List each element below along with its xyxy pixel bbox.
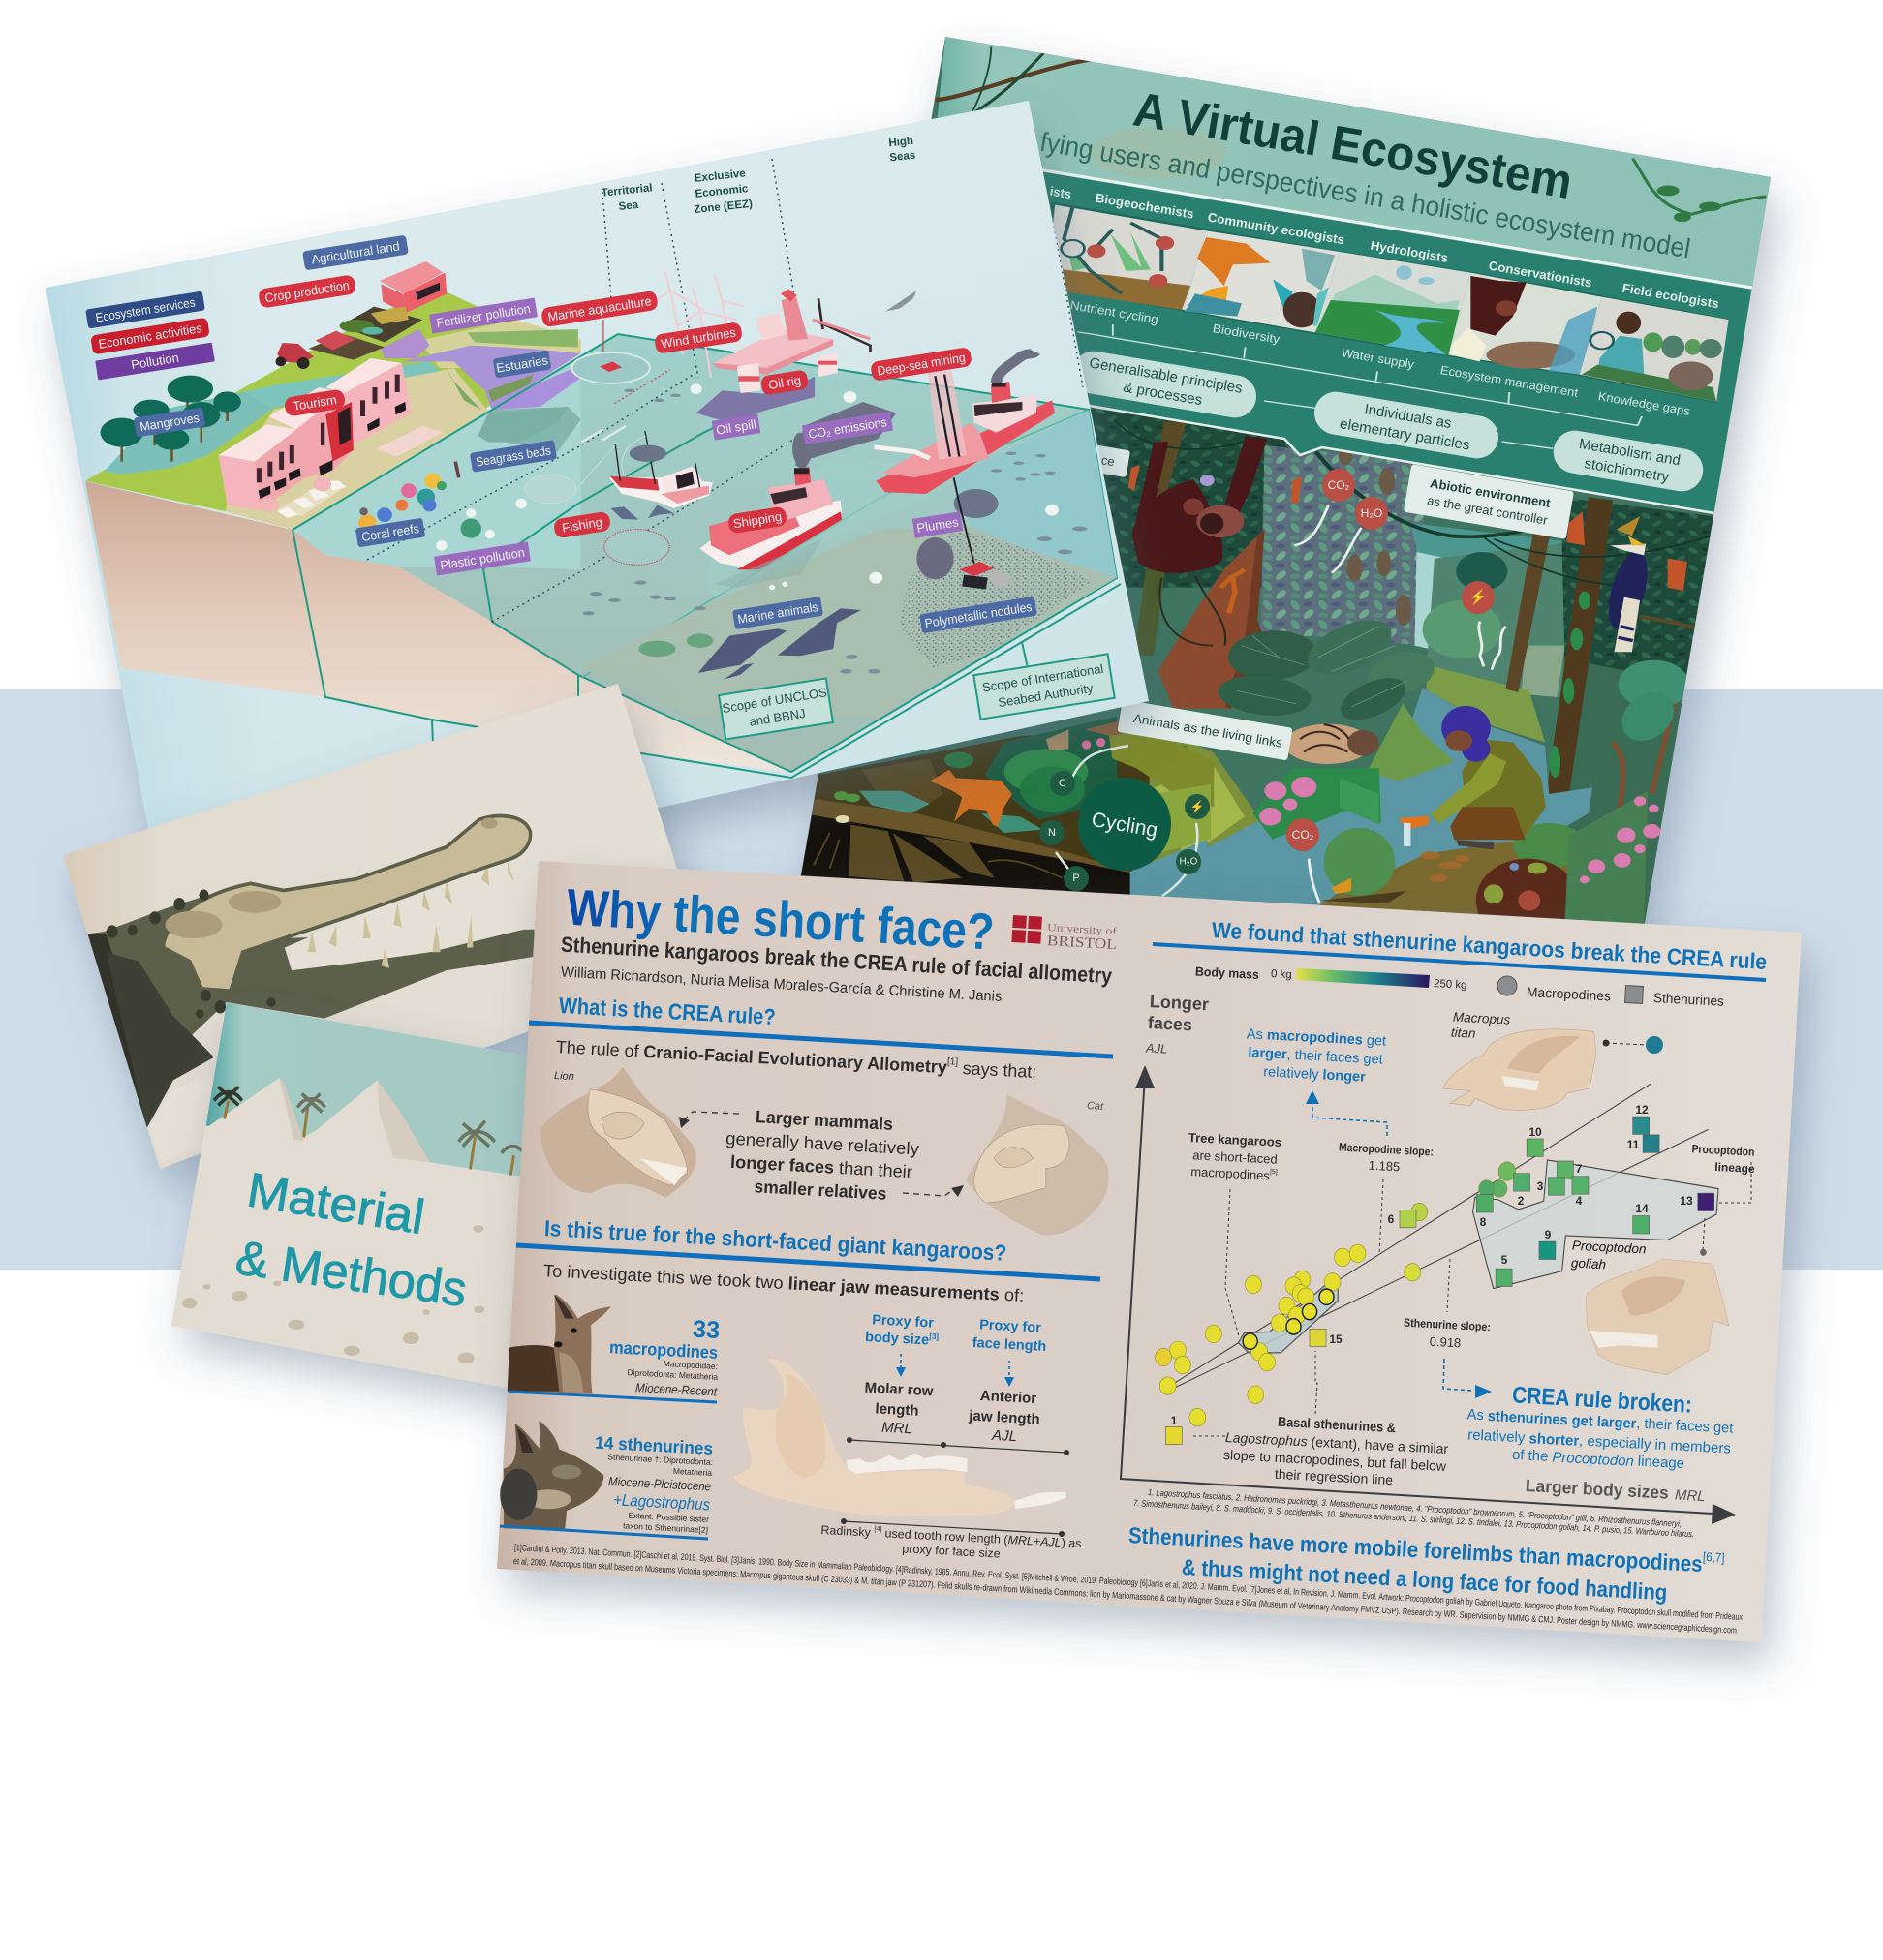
text: as macropodines get larger: relatively longer: [1263, 1064, 1366, 1086]
anterior jaw length: AJL: [991, 1427, 1017, 1445]
plumes: [954, 489, 999, 518]
text: larger mammals: smaller relatives: [754, 1177, 887, 1204]
arrow: to lion: [679, 1112, 739, 1128]
text: tree kangaroos: macropodines: [1190, 1164, 1270, 1182]
panel: why the short face poster: [497, 861, 1802, 1642]
illustration: procoptodon skull: [1586, 1249, 1729, 1375]
text: procoptodon lineage: [1691, 1142, 1755, 1176]
abiotic flux icons: ⚡: [1469, 589, 1487, 606]
mossy bank: [1055, 728, 1259, 864]
pill: metabolism: stoichiometry: [1583, 455, 1671, 486]
species list: 1. Lagostrophus fasciatus, 2. Hadronomas puckridgi, 3. Metasthenurus newtonae, 4. "Procoptodon" browneorum, 5. "Procoptodon" gilli, 6. Rhizosthenurus flanneryi,: [1148, 1487, 1682, 1529]
anterior jaw length: jaw length: [968, 1408, 1040, 1427]
label: legend economic activities: Economic activities: [97, 321, 203, 352]
heading: what is the crea rule: What is the CREA rule?: [558, 993, 776, 1029]
label: macropus titan: Macropus: [1453, 1010, 1511, 1027]
aquaculture ring: [571, 352, 650, 383]
text: macropodines count: macropodines: [609, 1337, 719, 1363]
proxy for face length: face length: [972, 1335, 1047, 1355]
anterior jaw length: Anterior: [979, 1388, 1037, 1407]
panel: gharial poster: [63, 684, 697, 1169]
label: shipping: Shipping: [732, 509, 783, 531]
macropodine points: [1155, 1162, 1516, 1426]
label: shipping: [727, 505, 787, 535]
callout: animals: [1117, 699, 1293, 760]
label: tourism: [284, 388, 346, 417]
oil spill: [696, 378, 815, 423]
sea box: [293, 334, 1117, 772]
cycling hub: ⚡: [1190, 800, 1204, 813]
point numbers: [1171, 1103, 1693, 1427]
text: macropodines count: 33: [692, 1316, 721, 1344]
hornbill: [1609, 552, 1648, 630]
user needs: [1069, 298, 1691, 418]
label: crop production: Crop production: [263, 278, 351, 305]
box: scope of ISA: [973, 654, 1115, 720]
label: fertilizer pollution: Fertilizer pollution: [435, 301, 532, 330]
point numbers: 15: [1329, 1332, 1343, 1346]
point numbers: 11: [1627, 1138, 1640, 1151]
box: scope of UNCLOS: Scope of UNCLOS: [722, 685, 828, 716]
logo: university of bristol: University of: [1047, 922, 1118, 937]
CO2 smoke: [795, 402, 896, 472]
zone heading: EEZ: Exclusive: [694, 168, 746, 185]
seedling: [836, 815, 849, 823]
abiotic flux icons: [1286, 469, 1495, 851]
measure line: [847, 1437, 1069, 1455]
illustration: gharial: [88, 816, 539, 1162]
point numbers: 14: [1635, 1202, 1649, 1215]
connector: macropus titan: [1602, 1036, 1663, 1054]
radinsky line: [841, 1518, 1064, 1536]
proxy for face length: Proxy for: [979, 1317, 1042, 1336]
chevrotain: [930, 770, 1012, 827]
molar row length: length: [875, 1400, 919, 1420]
heading: methods: & Methods: [232, 1230, 471, 1317]
y axis label: AJL: [1145, 1040, 1168, 1057]
text: as macropodines get larger: [1247, 1026, 1386, 1086]
label: estuaries: Estuaries: [495, 352, 549, 376]
hotel: [219, 424, 296, 462]
dashed pointers: [1191, 1162, 1751, 1436]
diver: [455, 462, 459, 477]
proxy for body size: body size: [865, 1330, 930, 1348]
text: procoptodon goliah: Procoptodon: [1572, 1239, 1647, 1256]
y axis label: [1145, 992, 1209, 1057]
text: crea rule broken: relatively shorter, especially in members: [1467, 1426, 1731, 1457]
callout: abiotic environment: Abiotic environment: [1429, 475, 1552, 510]
text: basal sthenurines: [1223, 1414, 1449, 1487]
pill: generalisable principles: [1069, 348, 1259, 421]
label: fishing: [553, 511, 611, 538]
point numbers: 1: [1171, 1414, 1178, 1427]
label: marine aquaculture: Marine aquaculture: [546, 293, 653, 324]
text: procoptodon goliah: [1571, 1239, 1647, 1271]
legend: 0 kg: [1271, 968, 1292, 981]
cargo ship: [699, 501, 842, 569]
zone heading: EEZ: Zone (EEZ): [694, 199, 754, 216]
fern and civet: [1368, 704, 1454, 781]
proxy for body size: [3]: [929, 1332, 940, 1341]
molar row length: [864, 1380, 934, 1437]
authors: William Richardson, Nuria Melisa Morales-García & Christine M. Janis: [561, 965, 1003, 1005]
box: scope of ISA: Seabed Authority: [997, 681, 1095, 710]
text: crea rule broken: CREA rule broken:: [1511, 1382, 1693, 1419]
abiotic flux icons: H₂O: [1361, 506, 1382, 520]
text: as macropodines get larger: larger, their faces get: [1248, 1045, 1383, 1068]
user categories: ists: [1049, 184, 1072, 201]
conclusion text: [1127, 1520, 1725, 1605]
x axis label: Larger body sizes: [1525, 1476, 1669, 1503]
text: crea rule broken: [1466, 1382, 1735, 1472]
point numbers: 3: [1537, 1179, 1544, 1193]
label: seagrass beds: Seagrass beds: [475, 443, 552, 470]
user needs: Ecosystem management: [1439, 363, 1580, 400]
point numbers: 2: [1518, 1194, 1525, 1208]
label: oil rig: [760, 369, 809, 396]
point numbers: 9: [1545, 1228, 1552, 1241]
point numbers: 5: [1501, 1253, 1508, 1267]
turbines: [648, 271, 744, 378]
panel: virtual ecosystem poster: [799, 37, 1771, 968]
heading: we found: We found that sthenurine kangaroos break the CREA rule: [1211, 917, 1768, 974]
cycling hub: Cycling: [1090, 809, 1159, 842]
label: cat: Cat: [1087, 1100, 1104, 1113]
soil ball: [1476, 858, 1567, 920]
legend: Body mass: [1195, 965, 1259, 982]
hull: tree kangaroos: [1238, 1286, 1338, 1353]
point numbers: 8: [1480, 1215, 1487, 1229]
barn: [380, 261, 444, 293]
illustration: jaw: [733, 1359, 1066, 1516]
heading: material: Material: [244, 1162, 428, 1244]
label: legend ecosystem services: Ecosystem services: [94, 294, 197, 325]
fish: [583, 389, 1087, 674]
sthenurine points: [1165, 1117, 1714, 1445]
flowering plant: [1252, 768, 1381, 840]
text: radinsky: used tooth row length (MRL+AJL) as: [884, 1526, 1082, 1550]
text: radinsky: [4]: [874, 1525, 882, 1533]
text: crea rule broken: As sthenurines get larger, their faces get: [1466, 1406, 1735, 1437]
arrow: crea blue: [1443, 1359, 1492, 1398]
heading: is this true: Is this true for the short-faced giant kangaroos?: [543, 1215, 1007, 1266]
panel: material and methods poster: [161, 1002, 581, 1409]
label: oil rig: Oil rig: [767, 373, 802, 392]
user categories: Biogeochemists: [1095, 191, 1195, 222]
label: marine animals: Marine animals: [736, 599, 819, 627]
text: crea rule: [1]: [947, 1057, 959, 1067]
text: investigate: To investigate this we took two linear jaw measurements of:: [542, 1261, 1025, 1305]
left land illustration: [85, 261, 581, 569]
photo: sthenurine: [500, 1421, 603, 1530]
abiotic flux icons: CO₂: [1292, 828, 1314, 842]
label: agricultural land: Agricultural land: [310, 238, 401, 267]
illustration: cat skull: [966, 1094, 1109, 1236]
text: sthenurines count: 14 sthenurines: [595, 1433, 714, 1458]
y axis label: Longer: [1149, 992, 1209, 1014]
user categories: Community ecologists: [1207, 210, 1345, 247]
user categories: Conservationists: [1488, 259, 1593, 290]
user needs: Nutrient cycling: [1069, 298, 1159, 326]
label: oil spill: [712, 413, 760, 441]
text: macropodines count: Diprotodonta: Metatheria: [627, 1367, 719, 1382]
logo: university of bristol: [1011, 915, 1118, 953]
mangroves: [122, 390, 228, 462]
white arrows: [1294, 505, 1505, 903]
vines: [1315, 452, 1529, 536]
field ecologist: [1462, 739, 1546, 836]
subtitle: Sthenurine kangaroos break the CREA rule of facial allometry: [560, 933, 1113, 988]
anterior jaw length: [968, 1388, 1040, 1445]
text: macropodine slope: Macropodine slope:: [1339, 1140, 1434, 1159]
sea outlines: [293, 334, 1121, 778]
point numbers: 13: [1680, 1194, 1693, 1208]
text: larger mammals: Larger mammals: [756, 1107, 893, 1134]
cycling hub: C: [1059, 778, 1066, 789]
molar row length: MRL: [881, 1420, 912, 1437]
seagull: [885, 291, 916, 312]
text: larger mammals: [725, 1107, 919, 1204]
zone heading: EEZ: Economic: [695, 183, 750, 200]
text: larger mammals: generally have relatively: [725, 1128, 919, 1159]
zone heading: high seas: Seas: [889, 150, 916, 164]
text: procoptodon lineage: Procoptodon: [1691, 1142, 1755, 1159]
legend: Macropodines: [1527, 984, 1611, 1004]
text: macropodines count: Miocene-Recent: [635, 1380, 719, 1399]
cycling hub: [1039, 771, 1210, 891]
oil rig: [713, 329, 833, 368]
fishing boat: [609, 477, 713, 508]
text: tree kangaroos: [1188, 1130, 1281, 1183]
cycling hub: H₂O: [1180, 856, 1198, 868]
text: macropodine slope: [1339, 1140, 1434, 1174]
label: fishing: Fishing: [561, 514, 603, 536]
legend: Sthenurines: [1653, 990, 1724, 1009]
orangutan: [1132, 436, 1267, 573]
proxy for face length: [972, 1317, 1047, 1355]
zone heading: EEZ: [691, 168, 754, 216]
cliff: [85, 481, 789, 772]
text: macropodines count: [609, 1316, 721, 1399]
dolphins and gulls: [611, 506, 638, 520]
label: wind turbines: Wind turbines: [660, 324, 737, 352]
text: sthenurines count: [595, 1433, 714, 1535]
illustrated strip: [1046, 201, 1729, 448]
pill: individuals: [1312, 388, 1501, 462]
label: mangroves: Mangroves: [139, 411, 201, 434]
right side plants: [1610, 703, 1678, 809]
label: macropus titan: titan: [1451, 1026, 1476, 1041]
conclusion text: Sthenurines have more mobile forelimbs than macropodines: [1127, 1522, 1771, 1580]
point numbers: 6: [1388, 1212, 1395, 1226]
text: procoptodon goliah: goliah: [1571, 1256, 1606, 1271]
user needs: Water supply: [1341, 346, 1416, 372]
sea surface: [293, 355, 581, 569]
callout: ce: ce: [1100, 452, 1116, 469]
label: plumes: [912, 511, 963, 538]
text: tree kangaroos: [5]: [1270, 1168, 1278, 1176]
illustration: lion skull: [540, 1067, 696, 1198]
label: plumes: Plumes: [915, 514, 960, 536]
coral: [358, 474, 481, 538]
title: Why the short face?: [565, 879, 996, 962]
text: sthenurine slope: [1404, 1316, 1491, 1350]
title: A Virtual Ecosystem: [1129, 81, 1576, 209]
right sea illustration: [571, 271, 1117, 717]
legend: 250 kg: [1434, 978, 1467, 992]
seagrass: [478, 407, 568, 443]
label: macropus titan: [1451, 1010, 1511, 1041]
callout: ce: [1068, 442, 1130, 477]
illustration: macropus skull: [1443, 1029, 1596, 1110]
pill: individuals: elementary particles: [1339, 415, 1471, 454]
proxy for body size: Proxy for: [872, 1312, 935, 1332]
text: sthenurine slope: 0.918: [1429, 1334, 1462, 1350]
text: basal sthenurines: Lagostrophus (extant), have a similar: [1225, 1429, 1449, 1456]
zone heading: high seas: High: [888, 136, 914, 149]
pill: individuals: Individuals as: [1363, 401, 1453, 432]
zone heading: territorial sea: [601, 182, 655, 215]
text: larger mammals: longer faces than their: [730, 1152, 912, 1181]
text: crea rule broken: of the Procoptodon lineage: [1512, 1447, 1684, 1472]
user categories: Hydrologists: [1370, 238, 1449, 265]
text: macropodines count: Macropodidae:: [664, 1359, 718, 1371]
fields: [308, 334, 385, 360]
text: tree kangaroos: Tree kangaroos: [1188, 1130, 1281, 1149]
text: tree kangaroos: are short-faced: [1192, 1148, 1278, 1167]
user needs: Knowledge gaps: [1597, 389, 1691, 418]
ground: [1315, 823, 1648, 923]
box: scope of UNCLOS: [719, 679, 833, 739]
panel: marine poster: [46, 101, 1149, 915]
label: deep-sea mining: Deep-sea mining: [876, 350, 967, 379]
conclusion text: & thus might not need a long face for food handling: [1181, 1554, 1668, 1605]
text: radinsky: Radinsky: [820, 1523, 871, 1540]
flux arrows near cycling: [1056, 746, 1197, 896]
box: scope of ISA: Scope of International: [981, 661, 1104, 694]
molar row length: Molar row: [864, 1380, 934, 1399]
label: coral reefs: Coral reefs: [360, 521, 420, 544]
palm trees: [225, 1101, 513, 1176]
point numbers: 10: [1528, 1125, 1542, 1139]
text: radinsky: [820, 1522, 1082, 1561]
label: polymetallic nodules: Polymetallic nodules: [924, 599, 1034, 630]
zone heading: high seas: [887, 136, 916, 164]
user needs: Biodiversity: [1212, 322, 1281, 347]
text: sthenurines count: +Lagostrophus: [613, 1490, 711, 1515]
regression lines: [1176, 1084, 1709, 1388]
label: lion: Lion: [554, 1070, 574, 1083]
text: crea rule: says that:: [957, 1058, 1037, 1082]
text: sthenurines count: Extant. Possible sister: [628, 1511, 709, 1524]
text: procoptodon lineage: lineage: [1714, 1160, 1755, 1176]
user categories: [1049, 184, 1720, 311]
callout: abiotic environment: as the great controller: [1426, 493, 1549, 528]
arrow: to cat: [903, 1185, 964, 1197]
text: radinsky: proxy for face size: [902, 1542, 1001, 1561]
fruit pods: [1339, 448, 1411, 626]
label: oil spill: Oil spill: [715, 416, 757, 438]
photo: kangaroo: [508, 1295, 611, 1393]
text: basal sthenurines: their regression line: [1275, 1466, 1394, 1487]
strip connector lines: [1077, 324, 1642, 448]
hull: procoptodon lineage: [1473, 1160, 1718, 1289]
label: tourism: Tourism: [292, 392, 338, 413]
zone heading: territorial sea: Sea: [618, 199, 639, 213]
subtitle: fying users and perspectives in a holistic ecosystem model: [1037, 127, 1692, 263]
text: basal sthenurines: Basal sthenurines &: [1278, 1414, 1396, 1435]
text: sthenurines count: Miocene-Pleistocene: [608, 1474, 711, 1493]
text: sthenurines count: taxon to Sthenurinae[2]: [623, 1520, 708, 1535]
pill: generalisable principles: Generalisable principles: [1088, 354, 1244, 397]
axes: [1121, 1065, 1736, 1524]
callout: abiotic environment: [1404, 464, 1574, 539]
pill: metabolism: [1550, 427, 1707, 495]
text: crea rule: The rule of Cranio-Facial Evolutionary Allometry: [555, 1037, 949, 1077]
illustration: desert scene: [161, 1002, 569, 1409]
x axis label: MRL: [1675, 1487, 1706, 1505]
point numbers: 12: [1635, 1103, 1649, 1117]
point numbers: 7: [1576, 1162, 1583, 1176]
point numbers: 4: [1576, 1194, 1583, 1208]
lower-left forest illustration: [801, 717, 1214, 898]
text: sthenurines count: Metatheria: [673, 1466, 713, 1478]
whales: [698, 628, 787, 673]
label: agricultural land: [302, 235, 409, 270]
arrow: macropodines blue: [1306, 1090, 1387, 1136]
forest header band: [938, 37, 1771, 402]
text: as macropodines get larger: As macropodines get: [1247, 1026, 1386, 1050]
text: macropodine slope: 1.185: [1368, 1158, 1401, 1174]
proxy for body size: [865, 1312, 940, 1349]
label: legend pollution: [95, 343, 215, 380]
river: [1180, 688, 1592, 905]
cycling hub: P: [1072, 873, 1080, 884]
header vine and band: [936, 46, 1766, 222]
big leaves: [1228, 630, 1313, 679]
scatter plot: [1155, 1084, 1718, 1445]
text: sthenurines count: Sthenurinae †: Diprotodonta:: [607, 1452, 713, 1467]
arrows: proxies: [896, 1354, 1014, 1387]
logo: university of bristol: BRISTOL: [1047, 934, 1117, 953]
pill: generalisable principles: & processes: [1122, 380, 1203, 409]
species list: 7. Simosthenurus baileyi, 8. S. maddocki, 9. S. occidentalis, 10. Sthenurus andersoni, 11. S. stirlingi, 12. S. tindalei, 13. Procoptodon goliah, 14. P. pusio, 15. Wanburoo hilarus.: [1133, 1498, 1694, 1539]
trunks: [1158, 530, 1265, 709]
cycling hub: N: [1048, 827, 1056, 839]
tractor and harvester: [277, 343, 314, 363]
text: basal sthenurines: slope to macropodines, but fall below: [1223, 1447, 1447, 1474]
text: sthenurine slope: Sthenurine slope:: [1404, 1316, 1491, 1333]
y axis label: faces: [1147, 1013, 1193, 1034]
forest illustration: [1055, 404, 1767, 942]
box: scope of UNCLOS: and BBNJ: [748, 706, 806, 729]
legend: [1195, 965, 1724, 1009]
zone heading: territorial sea: Territorial: [601, 182, 653, 199]
callout: animals: Animals as the living links: [1132, 711, 1284, 750]
mining ship: [876, 400, 1055, 494]
background band: [0, 689, 1883, 1270]
label: plastic pollution: Plastic pollution: [439, 545, 526, 572]
user categories: Field ecologists: [1621, 281, 1720, 311]
label: co2 emissions: CO₂ emissions: [807, 414, 888, 442]
label: legend pollution: Pollution: [130, 351, 180, 372]
abiotic flux icons: CO₂: [1328, 478, 1350, 492]
lizard: [1221, 569, 1245, 613]
conclusion text: [6,7]: [1703, 1549, 1725, 1565]
pill: metabolism: Metabolism and: [1578, 436, 1682, 469]
